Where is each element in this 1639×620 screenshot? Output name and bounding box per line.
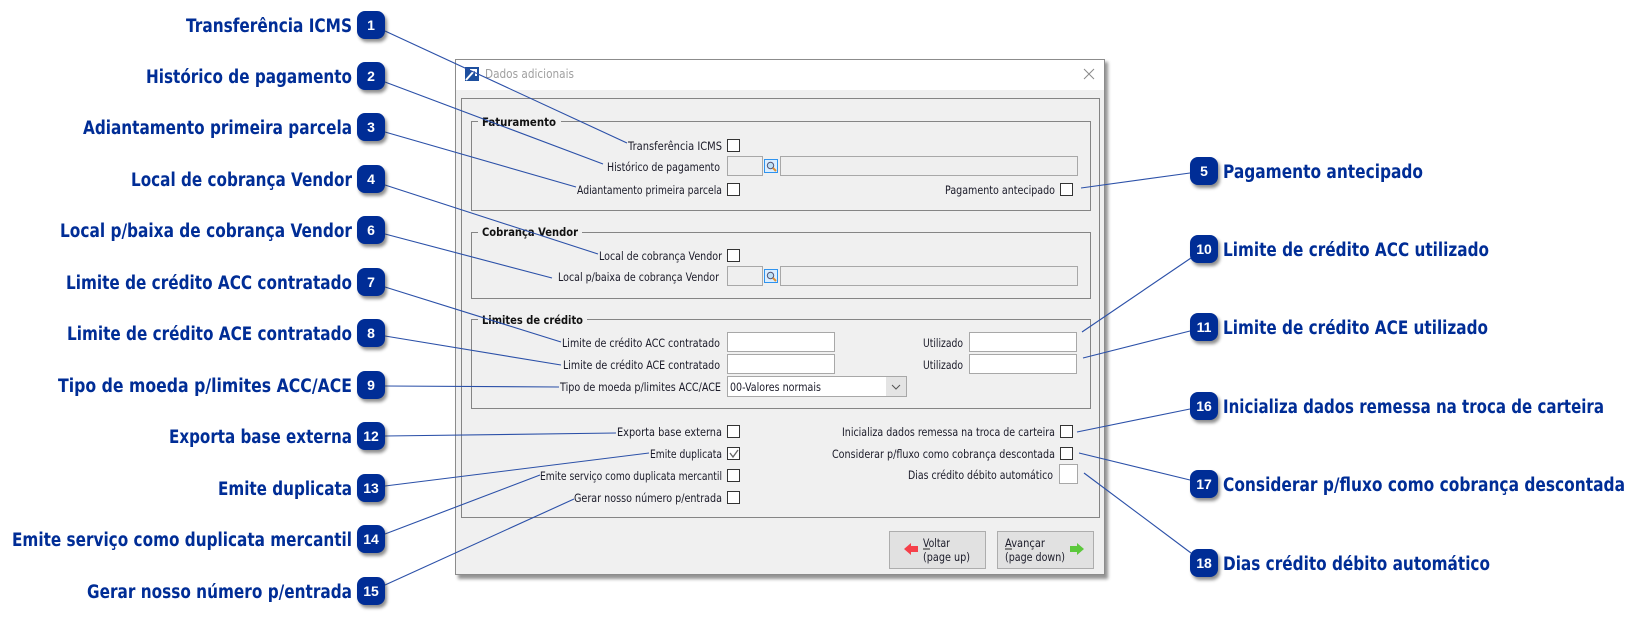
callout 6 [60,216,552,278]
panel: Cobrança Vendor [472,225,1090,298]
callout 9 [58,371,559,402]
callout 11 [1083,313,1488,358]
dialog window [456,60,1108,579]
field: Histórico de pagamento [607,156,1078,176]
callout 2 [146,62,603,164]
callout 12 [169,422,616,453]
callout 15: 15 [363,583,379,599]
callout 18: Dias crédito débito automático [1223,554,1490,575]
button: Avançar [998,532,1094,568]
callout 7: Limite de crédito ACC contratado [66,273,352,294]
callout 5: Pagamento antecipado [1223,162,1423,183]
field: Transferência ICMS: Transferência ICMS [627,139,722,153]
field: Tipo de moeda [559,376,906,396]
field: Limite de crédito ACE contratado [563,354,834,374]
field: Utilizado ACE [923,354,1076,374]
callout 14: 14 [363,531,379,547]
callout 2: 2 [367,68,375,84]
callout 14: Emite serviço como duplicata mercantil [12,530,352,551]
outer frame [462,98,1100,518]
callout 8: 8 [367,325,375,341]
field: Limite de crédito ACC contratado: Limite de crédito ACC contratado [562,336,720,350]
field: Histórico de pagamento: Histórico de pagamento [607,160,720,174]
field: Local p/baixa de cobrança Vendor [558,266,1078,286]
button: Voltar [890,532,986,568]
heading: Cobrança Vendor: Cobrança Vendor [482,225,578,239]
callout 3: Adiantamento primeira parcela [83,118,352,139]
heading: Faturamento: Faturamento [482,115,556,129]
callout 12: Exporta base externa [169,427,352,448]
callout 7 [66,268,561,342]
callout 3 [83,113,576,187]
callout 8: Limite de crédito ACE contratado [67,324,352,345]
callout 16: 16 [1196,398,1212,414]
callout 11: Limite de crédito ACE utilizado [1223,318,1488,339]
field: Utilizado ACE: Utilizado [923,358,963,372]
field: Tipo de moeda: Tipo de moeda p/limites ACC/ACE [559,380,721,394]
callout 13: Emite duplicata [218,479,352,500]
callout 15 [87,499,574,608]
callout 1: 1 [367,17,375,33]
callout 17: 17 [1196,476,1212,492]
callout 5: 5 [1200,163,1208,179]
field: Limite de crédito ACC contratado [562,332,834,352]
callout 1 [186,11,627,143]
callout 14 [12,475,540,556]
callout 16 [1077,392,1604,432]
checkbox: Considerar p/fluxo: Considerar p/fluxo como cobrança descontada [832,447,1055,461]
heading: Limites de crédito: Limites de crédito [482,313,583,327]
checkbox: Exporta base externa: Exporta base externa [617,425,722,439]
button: Avançar: (page down) [1005,550,1065,564]
callout 2: Histórico de pagamento [146,67,352,88]
callout 9: Tipo de moeda p/limites ACC/ACE [58,376,352,397]
callout 10 [1082,235,1489,332]
icon: window icon [465,67,479,81]
field: Local p/baixa de cobrança Vendor: Local p/baixa de cobrança Vendor [558,270,719,284]
button: Voltar: Voltar [923,536,950,550]
checkbox: Gerar nosso número: Gerar nosso número p/entrada [574,491,722,505]
callout 11: 11 [1197,319,1212,335]
callout 6: 6 [367,222,375,238]
callout 4: 4 [367,171,375,187]
callout 15: Gerar nosso número p/entrada [87,582,352,603]
callout 18 [1084,473,1490,580]
icon: close [1084,69,1094,79]
callout 10: 10 [1196,241,1212,257]
callout 13: 13 [363,480,379,496]
dialog title: Dados adicionais [485,67,574,81]
checkbox: Emite duplicata: Emite duplicata [650,447,722,461]
callout 1: Transferência ICMS [186,16,352,37]
field: Adiantamento primeira parcela: Adiantamento primeira parcela [577,183,722,197]
field: Dias crédito: Dias crédito débito automático [908,468,1053,482]
callout 5 [1081,157,1423,188]
field: Pagamento antecipado: Pagamento antecipado [945,183,1055,197]
button: Voltar: (page up) [923,550,970,564]
callout 13 [218,453,649,505]
button: Avançar: Avançar [1005,536,1045,550]
callout 6: Local p/baixa de cobrança Vendor [60,221,353,242]
callout 7: 7 [367,274,375,290]
checkbox: Emite serviço: Emite serviço como duplicata mercantil [540,469,722,483]
checkbox: Inicializa dados: Inicializa dados remessa na troca de carteira [842,425,1055,439]
callout 8 [67,319,561,365]
callout 3: 3 [367,119,375,135]
field: Utilizado ACC [923,332,1076,352]
field: Local de cobrança Vendor: Local de cobrança Vendor [599,249,722,263]
callout 4 [131,165,598,254]
callout 10: Limite de crédito ACC utilizado [1223,240,1489,261]
panel: Limites de crédito [472,313,1090,408]
field: Limite de crédito ACE contratado: Limite de crédito ACE contratado [563,358,720,372]
callout 4: Local de cobrança Vendor [131,170,353,191]
callout 17 [1079,453,1625,501]
field: Utilizado ACC: Utilizado [923,336,963,350]
callout 9: 9 [367,377,375,393]
panel: Faturamento [472,115,1090,210]
field: Tipo de moeda: 00-Valores normais [730,380,821,394]
callout 18: 18 [1196,555,1212,571]
callout 12: 12 [363,428,379,444]
